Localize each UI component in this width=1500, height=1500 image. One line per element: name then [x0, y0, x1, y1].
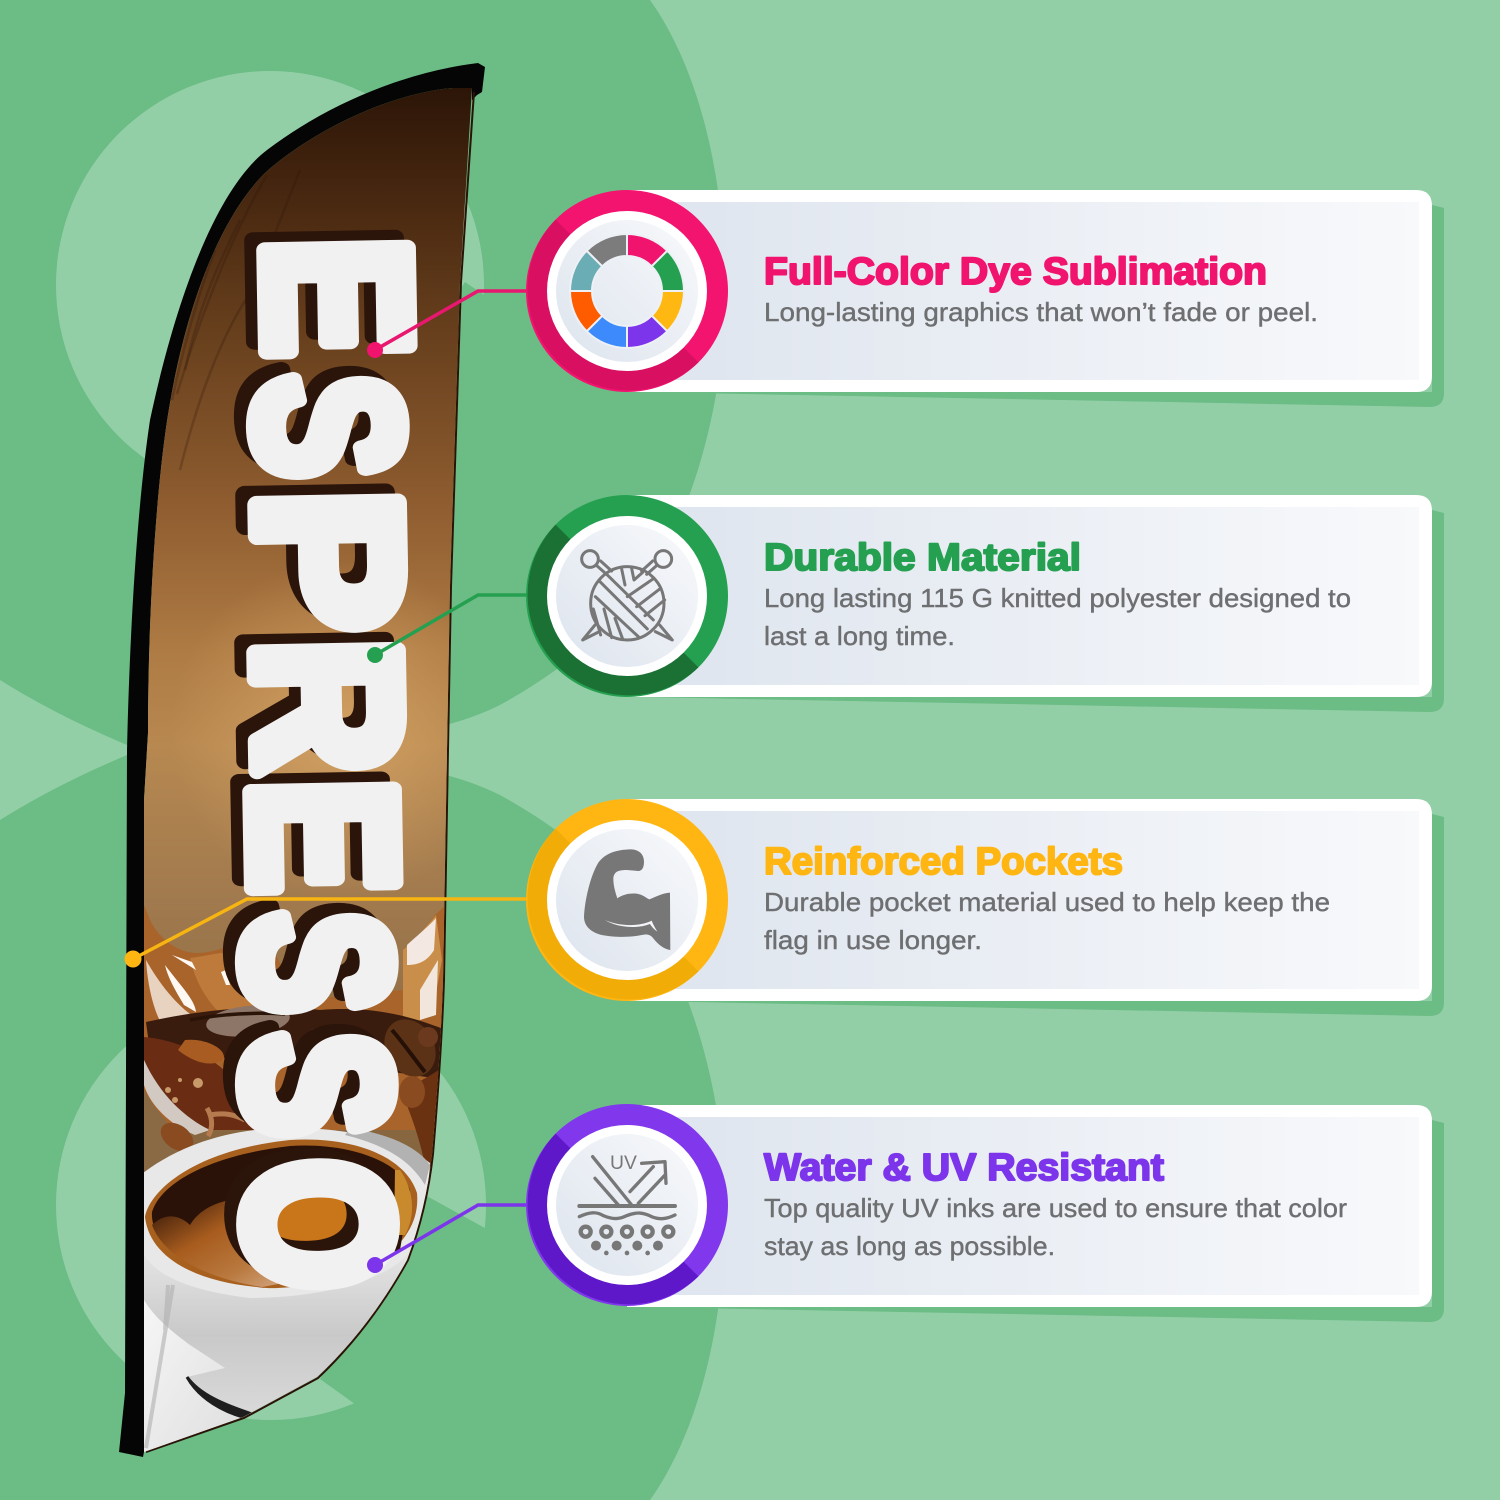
title: Full-Color Dye Sublimation	[764, 251, 1267, 293]
badge: knitting	[526, 495, 728, 697]
letter faces: E	[220, 235, 453, 360]
description: Long-lasting graphics that won’t fade or peel.	[764, 297, 1318, 327]
letter faces	[201, 235, 453, 1292]
flag lettering: ESPRESSO	[189, 225, 453, 1292]
letter shadows: O	[190, 1147, 423, 1282]
letter faces: S	[201, 909, 433, 1016]
card shadow: durable	[640, 510, 1444, 712]
letter shadows: S	[189, 1020, 421, 1130]
icon: UV reflection: UV	[610, 1153, 637, 1174]
letter shadows: R	[199, 627, 432, 766]
letter shadows: S	[200, 362, 432, 471]
title: Water & UV Resistant	[764, 1147, 1164, 1189]
description	[764, 1193, 1347, 1261]
badge: UV	[526, 1104, 728, 1306]
coffee cup	[144, 1129, 430, 1452]
letter faces: E	[207, 777, 438, 896]
letter shadows: P	[200, 478, 432, 623]
flag edge	[146, 92, 474, 1452]
letter shadows: S	[189, 899, 421, 1006]
background circle: lower light	[56, 990, 500, 1420]
connector: yellow	[124, 899, 530, 968]
background circle: upper light	[56, 71, 500, 499]
description: stay as long as possible.	[764, 1231, 1055, 1261]
badge: muscle	[526, 799, 728, 1001]
background blob: lower	[0, 751, 725, 1500]
icon: UV reflection	[579, 1153, 675, 1255]
card: Water & UV Resistant	[627, 1105, 1432, 1307]
letter shadows: E	[208, 225, 441, 350]
connector: pink	[367, 291, 530, 358]
feather flag	[119, 63, 485, 1460]
card shadow: dye sublimation	[640, 205, 1444, 407]
connector: purple	[367, 1205, 530, 1273]
card: Durable Material	[627, 495, 1432, 697]
title: Reinforced Pockets	[764, 841, 1123, 883]
letter faces: S	[201, 1030, 433, 1140]
letter faces: S	[212, 372, 444, 481]
letter shadows	[189, 225, 441, 1282]
letter faces: P	[212, 488, 444, 633]
background blob: upper	[0, 0, 725, 749]
card shadow: pockets	[640, 814, 1444, 1016]
connector: green	[367, 595, 530, 663]
flag fabric	[140, 80, 480, 1460]
description: flag in use longer.	[764, 925, 982, 955]
description: last a long time.	[764, 621, 955, 651]
chocolate splash	[144, 905, 446, 1172]
icon: color wheel	[570, 234, 684, 348]
letter shadows: E	[195, 767, 426, 886]
letter faces: O	[202, 1157, 435, 1292]
card: Full-Color Dye Sublimation	[627, 190, 1432, 392]
card shadow: UV	[640, 1120, 1444, 1322]
fabric wrinkles	[171, 214, 284, 470]
badge: color wheel	[526, 190, 728, 392]
card: Reinforced Pockets	[627, 799, 1432, 1001]
title: Durable Material	[764, 537, 1081, 579]
crema in O counter	[278, 1198, 347, 1241]
description: Top quality UV inks are used to ensure that color	[764, 1193, 1347, 1223]
cup saucer area	[144, 1240, 414, 1452]
description: Durable pocket material used to help keep the	[764, 887, 1330, 917]
icon: yarn ball and needles	[582, 551, 672, 640]
description	[764, 887, 1330, 955]
letter faces: R	[211, 637, 444, 776]
flag pole sleeve	[119, 63, 485, 1457]
description	[764, 583, 1351, 651]
icon: flexed arm	[584, 849, 670, 950]
description: Long lasting 115 G knitted polyester designed to	[764, 583, 1351, 613]
